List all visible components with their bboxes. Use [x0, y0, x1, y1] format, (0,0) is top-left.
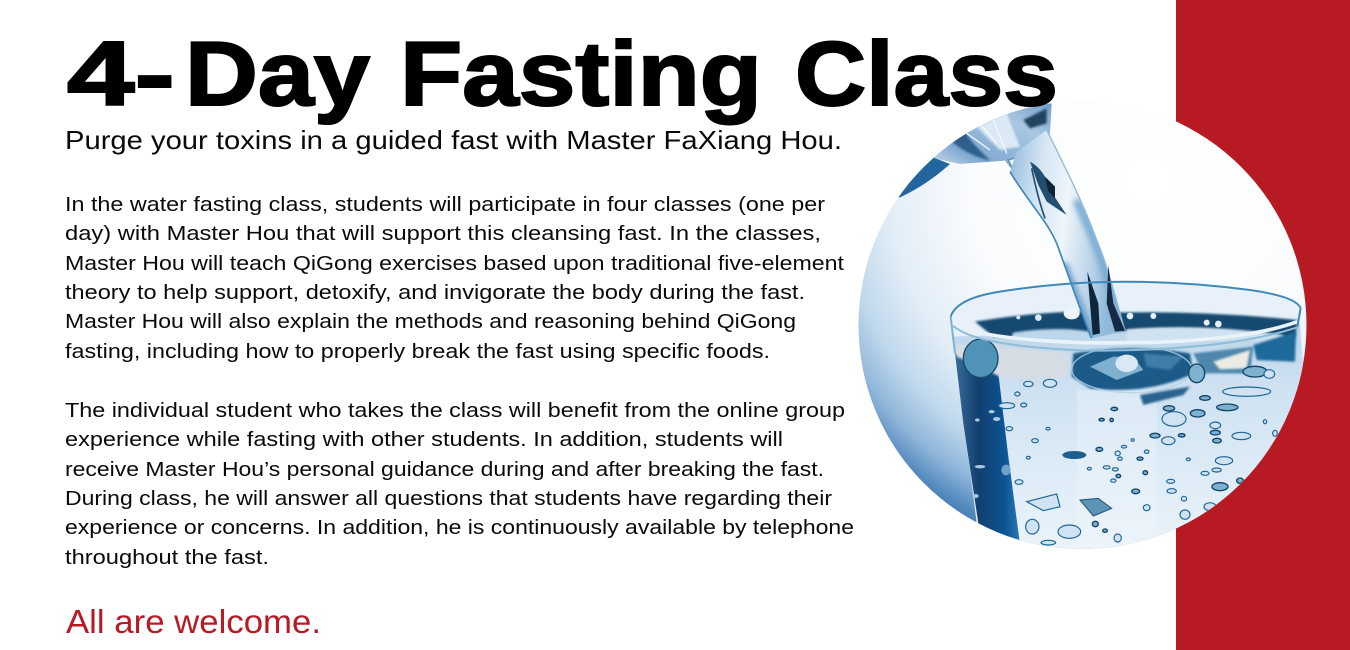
paragraph: student benefits: throughout the fast. — [65, 546, 269, 569]
title: Fasting — [400, 24, 762, 125]
foam band under rim — [955, 332, 1296, 405]
bubbles — [973, 366, 1277, 545]
paragraph: student benefits: receive Master Hou’s personal guidance during and after breaking the fast. — [65, 458, 824, 481]
title — [67, 24, 1058, 125]
paragraph: class description: theory to help support, detoxify, and invigorate the body during the fast. — [65, 281, 805, 304]
bottle neck — [893, 100, 1052, 197]
glass rim — [951, 282, 1301, 353]
paragraph: student benefits: experience or concerns. In addition, he is continuously available by telephone — [65, 516, 854, 539]
title: Class — [795, 24, 1058, 125]
water surface band — [974, 310, 1298, 340]
dark left band of glass — [955, 354, 1020, 540]
subtitle: Purge your toxins in a guided fast with Master FaXiang Hou. — [65, 125, 842, 155]
paragraph: class description: Master Hou will teach QiGong exercises based upon traditional five-element — [65, 252, 844, 275]
glass interior above water — [972, 282, 1300, 320]
paragraph: student benefits: The individual student who takes the class will benefit from the online group — [65, 399, 845, 422]
closing line: all are welcome: All are welcome. — [66, 603, 321, 640]
paragraph: class description: day) with Master Hou that will support this cleansing fast. In the classes, — [65, 222, 821, 245]
title: Day — [185, 24, 370, 125]
glass body water — [953, 323, 1317, 557]
paragraph: student benefits: experience while fasting with other students. In addition, students will — [65, 428, 783, 451]
water stream — [1010, 130, 1125, 338]
circular photo: water pouring into a glass — [850, 90, 1320, 560]
paragraph: class description: fasting, including how to properly break the fast using specific foods. — [65, 340, 770, 363]
paragraph: class description: Master Hou will also explain the methods and reasoning behind QiGong — [65, 310, 796, 333]
paragraph: class description: In the water fasting class, students will participate in four classes (one per — [65, 193, 825, 216]
title: 4- — [67, 24, 175, 125]
paragraph: student benefits — [65, 399, 854, 569]
red side panel — [1176, 0, 1350, 650]
light vertical seam in water — [1077, 390, 1157, 557]
paragraph: student benefits: During class, he will answer all questions that students have regarding their — [65, 487, 832, 510]
paragraph: class description — [65, 193, 844, 363]
